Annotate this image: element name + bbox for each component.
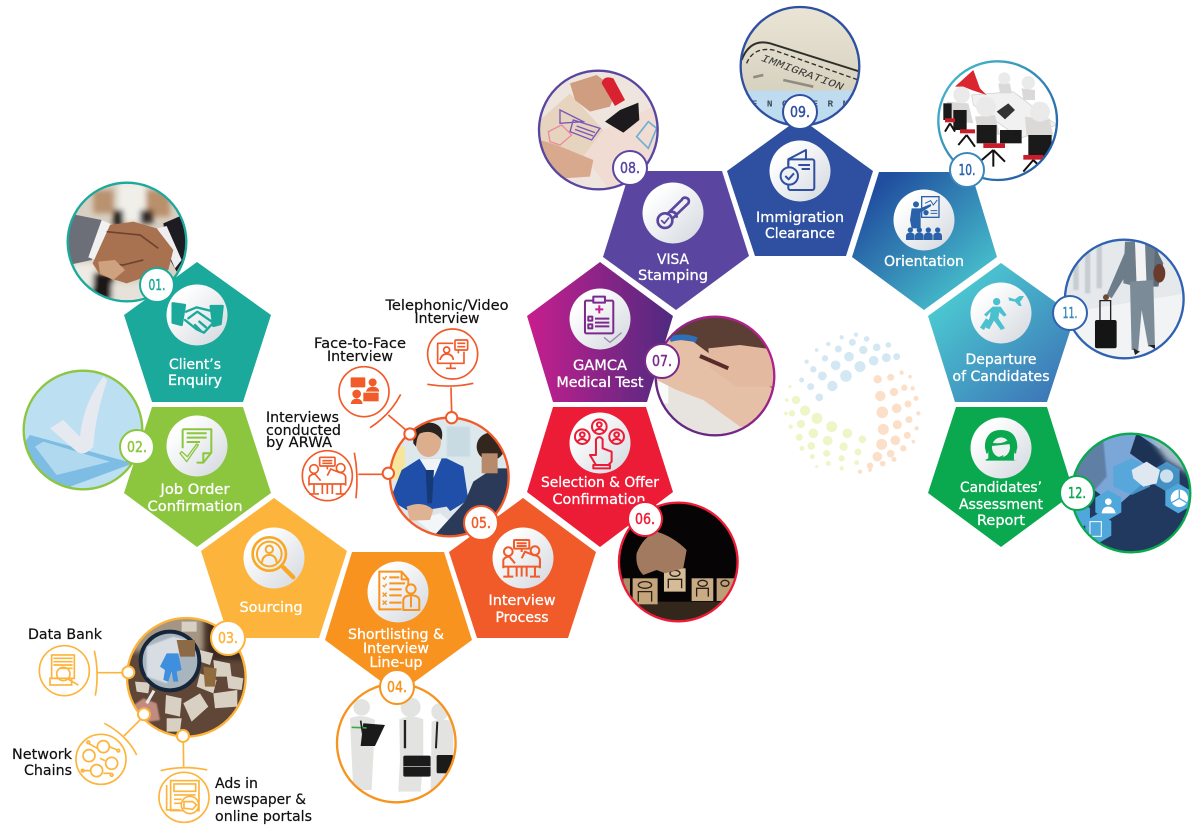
label: Ads in newspaper & online portals: newspaper &: [215, 792, 306, 808]
label: Job Order Confirmation: Confirmation: [148, 499, 242, 515]
icon circle: job order: [166, 416, 228, 476]
label: Candidates' Assessment Report: [959, 480, 1044, 529]
icon circle: selection: [570, 412, 630, 474]
label: Orientation: Orientation: [884, 254, 964, 270]
label: Departure of Candidates: of Candidates: [952, 369, 1050, 385]
label: Ads in newspaper & online portals: [215, 776, 312, 825]
label: Shortlisting & Interview Line-up: Shortlisting &: [348, 627, 444, 643]
label: Face-to-Face Interview: [314, 336, 406, 365]
icon circle: clipboard: [570, 288, 630, 350]
icon circle: presenter: [894, 190, 954, 250]
label: Client's Enquiry: Enquiry: [168, 373, 222, 389]
badge 08: [613, 151, 647, 185]
photo: handshake: [63, 180, 190, 307]
panel: step 08 visa stamping: [537, 68, 749, 310]
label: Selection & Offer Confirmation: [541, 475, 659, 508]
label: Candidates' Assessment Report: Assessment: [959, 497, 1044, 513]
label: Face-to-Face Interview: Interview: [327, 349, 393, 365]
label: Departure of Candidates: Departure: [966, 352, 1036, 368]
label: VISA Stamping: VISA: [657, 252, 689, 268]
photo: magnifying glass over blocks: [123, 615, 250, 742]
label: Telephonic/Video Interview: Interview: [414, 311, 480, 327]
label: Face-to-Face Interview: Face-to-Face: [314, 336, 406, 352]
sub-interview: face-to-face: [314, 336, 416, 440]
photo: passport stamp: [537, 68, 663, 195]
badge 12: 12.: [1068, 484, 1086, 502]
badge 11: 11.: [1062, 304, 1078, 322]
label: Job Order Confirmation: [148, 482, 242, 515]
badge 12: [1060, 476, 1094, 510]
label: Interviews conducted by ARWA: [266, 410, 341, 451]
badge 09: 09.: [790, 103, 810, 121]
badge 10: 10.: [958, 161, 976, 179]
pentagon 11: [928, 263, 1075, 402]
photo: immigration stamp: IMMIGRATION: [759, 53, 846, 94]
sub-source: ads: [159, 730, 312, 825]
icon circle: passport: [770, 140, 830, 202]
label: Ads in newspaper & online portals: Ads in: [215, 776, 258, 792]
badge 10: [950, 153, 984, 187]
badge 05: [464, 506, 498, 540]
pentagon 10: [852, 172, 997, 310]
badge 02: [120, 430, 154, 464]
photo: immigration stamp: [738, 5, 862, 128]
badge 02: 02.: [127, 438, 147, 456]
label: Immigration Clearance: Immigration: [756, 210, 844, 226]
pentagon 04: [325, 552, 472, 694]
label: Interview Process: [488, 593, 556, 626]
photo: standing figures: [333, 680, 460, 807]
label: Interviews conducted by ARWA: conducted: [266, 423, 341, 439]
photo: wooden blocks: [617, 500, 743, 627]
badge 09: [783, 95, 817, 129]
label: Network Chains: [12, 747, 73, 779]
label: GAMCA Medical Test: GAMCA: [573, 358, 627, 374]
panel: step 01 client's enquiry: [63, 180, 271, 402]
badge 05: 05.: [471, 514, 491, 532]
icon circle: traveller: [970, 282, 1032, 344]
label: Departure of Candidates: [952, 352, 1050, 385]
badge 04: 04.: [387, 678, 407, 696]
pentagon 05: [449, 498, 596, 638]
label: Network Chains: Network: [12, 747, 73, 763]
photo: meeting table: [937, 60, 1060, 183]
panel: step 05 interview process: [266, 298, 596, 638]
pentagon 07: [527, 262, 673, 402]
sub-source: data bank: [28, 627, 134, 696]
icon circle: headset person: [970, 418, 1032, 478]
pentagon 08: [603, 171, 749, 310]
label: Candidates' Assessment Report: Candidates’: [960, 480, 1042, 496]
photo: blood test: [653, 315, 780, 442]
sub-interview: conducted by ARWA: [266, 410, 394, 501]
badge 01: [140, 268, 174, 302]
pentagon 01: [124, 262, 271, 402]
label: Selection & Offer Confirmation: Selection & Offer: [541, 475, 659, 491]
photo: interview: [387, 415, 513, 542]
label: Telephonic/Video Interview: [384, 298, 508, 327]
badge 08: 08.: [620, 159, 640, 177]
pentagon 12: [928, 407, 1074, 547]
label: Shortlisting & Interview Line-up: Line-up: [370, 655, 423, 671]
decorative dotted globe: [785, 333, 920, 473]
badge 07: 07.: [652, 352, 672, 370]
pentagon 09: [727, 118, 873, 256]
badge 04: [380, 670, 414, 704]
label: Client's Enquiry: Client’s: [169, 357, 221, 373]
sub-interview: telephonic/video: [384, 298, 508, 423]
label: Job Order Confirmation: Job Order: [159, 482, 230, 498]
panel: step 02 job order confirmation: [17, 367, 271, 547]
badge 06: [628, 502, 662, 536]
panel: step 12 candidates' assessment report: [928, 407, 1193, 555]
panel: step 06 selection and offer: [527, 407, 743, 627]
label: Selection & Offer Confirmation: Confirmation: [552, 492, 646, 508]
photo: immigration stamp: ENC ERM: [752, 99, 849, 110]
label: Immigration Clearance: Clearance: [765, 226, 835, 242]
icon circle: handshake: [166, 284, 228, 346]
icon circle: interview meeting: [492, 528, 554, 588]
label: Shortlisting & Interview Line-up: Interview: [363, 641, 429, 657]
label: Shortlisting & Interview Line-up: [348, 627, 444, 671]
panel: step 04 shortlisting: [325, 552, 472, 807]
label: Data Bank: Data Bank: [28, 627, 103, 643]
label: VISA Stamping: Stamping: [638, 268, 708, 284]
panel: step 09 immigration clearance: [727, 5, 873, 256]
label: Sourcing: Sourcing: [240, 600, 302, 616]
badge 06: 06.: [635, 510, 655, 528]
photo: check mark: [22, 370, 144, 490]
sub-source: network chains: [12, 708, 150, 784]
badge 07: [645, 344, 679, 378]
label: GAMCA Medical Test: [556, 358, 644, 391]
label: Immigration Clearance: [756, 210, 844, 242]
badge 01: 01.: [148, 276, 166, 294]
icon circle: shortlist document: [368, 562, 428, 622]
label: VISA Stamping: [638, 252, 708, 284]
icon circle: magnifier: [244, 528, 304, 588]
badge 03: 03.: [218, 629, 238, 647]
badge 11: [1053, 296, 1087, 330]
panel: step 11 departure of candidates: [928, 238, 1187, 402]
label: Interviews conducted by ARWA: by ARWA: [266, 435, 332, 451]
label: Network Chains: Chains: [24, 763, 72, 779]
label: GAMCA Medical Test: Medical Test: [556, 375, 644, 391]
panel: step 10 orientation: [852, 60, 1060, 310]
label: Interview Process: Process: [496, 610, 548, 626]
label: Interview Process: Interview: [488, 593, 556, 609]
panel: step 07 GAMCA medical test: [527, 262, 780, 442]
pentagon 06: [527, 407, 673, 547]
pentagon 02: [124, 407, 271, 547]
panel: step 03 sourcing: [12, 498, 347, 825]
label: Telephonic/Video Interview: Telephonic/Video: [384, 298, 508, 314]
label: Candidates' Assessment Report: Report: [977, 513, 1026, 529]
badge 03: [211, 621, 245, 655]
photo: traveller with suitcase: [1063, 238, 1187, 362]
photo: digital hexagons: [1070, 432, 1193, 555]
label: Interviews conducted by ARWA: Interviews: [266, 410, 339, 426]
label: Client's Enquiry: [168, 357, 222, 389]
icon circle: stamp: [642, 182, 704, 244]
pentagon 03: [201, 498, 347, 638]
label: Ads in newspaper & online portals: online portals: [215, 809, 312, 825]
